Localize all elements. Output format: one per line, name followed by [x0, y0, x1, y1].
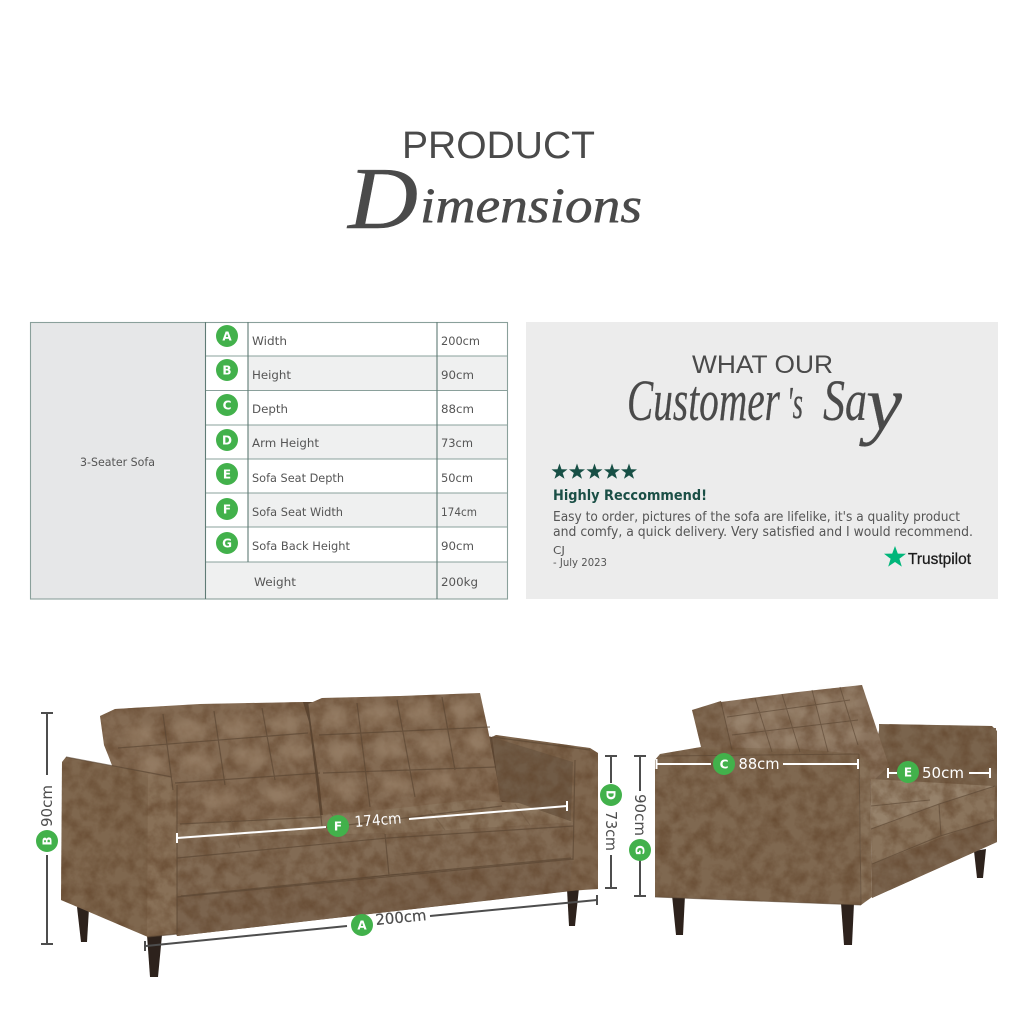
dimension G: back height 90cm: 90cm	[631, 794, 649, 836]
side stitching lines	[655, 687, 995, 905]
left arm front	[147, 774, 177, 937]
dimension E: seat depth 50cm: 50cm	[922, 764, 964, 782]
dimension A: width 200cm: 200cm	[375, 906, 427, 929]
side backing silhouette	[870, 726, 997, 898]
table row values: 174cm	[441, 505, 477, 519]
back cushions	[721, 685, 889, 782]
panel: dimensions table	[30, 322, 508, 599]
back cushion right	[308, 693, 502, 826]
table row values	[441, 334, 480, 589]
rating stars	[552, 464, 637, 479]
dimension E: seat depth 50cm: E	[904, 766, 912, 780]
dimension D: arm height 73cm	[600, 756, 622, 888]
review author: - July 2023	[553, 557, 607, 569]
side sofa legs	[672, 849, 986, 945]
table letter badges: E	[223, 468, 231, 482]
table row values: 88cm	[441, 402, 474, 416]
table row labels: Sofa Seat Depth	[252, 471, 344, 485]
table row values: 200cm	[441, 334, 480, 348]
table row labels: Sofa Seat Width	[252, 505, 343, 519]
review author: CJ	[553, 545, 565, 557]
panel: customer review	[526, 322, 998, 599]
dimension F: seat width 174cm	[177, 801, 567, 843]
table row labels: Width	[252, 334, 287, 348]
table letter badges: C	[223, 398, 232, 412]
table grid	[30, 322, 508, 599]
table row labels: Depth	[252, 402, 288, 416]
dimension C: depth 88cm	[656, 753, 858, 775]
review body	[553, 510, 973, 540]
right arm outer	[492, 735, 598, 891]
sofa upholstery	[61, 693, 598, 937]
title line: PRODUCT: PRODUCT	[402, 125, 595, 167]
seat cushion left	[177, 833, 389, 897]
table letter badges: F	[223, 502, 231, 516]
table row values: 50cm	[441, 471, 473, 485]
table shaded rows	[206, 356, 508, 599]
table row labels: Height	[252, 368, 292, 382]
side tuft highlights	[732, 689, 862, 750]
review body: Easy to order, pictures of the sofa are lifelike, it's a quality product	[553, 510, 960, 525]
trustpilot logo	[884, 546, 972, 568]
dimension B: height 90cm: B	[40, 836, 54, 846]
sofa legs	[77, 888, 579, 977]
dimension B: height 90cm: 90cm	[38, 785, 56, 827]
stitching lines	[66, 697, 590, 937]
arm panel main	[655, 747, 861, 905]
review heading script: 's	[787, 377, 803, 428]
dimension E: seat depth 50cm	[888, 761, 990, 783]
illustration: sofa front view	[61, 693, 598, 977]
table row labels: Weight	[254, 575, 297, 589]
back cushion left	[100, 702, 321, 826]
title script: Dimensions: D	[347, 151, 418, 248]
side upholstery	[655, 685, 997, 905]
seat cushion tops	[177, 800, 574, 860]
dimension F: seat width 174cm: F	[334, 820, 342, 834]
right arm inner	[492, 737, 575, 822]
table letter badges	[216, 325, 238, 554]
review author	[553, 545, 607, 569]
title	[347, 125, 642, 248]
dimension C: depth 88cm: 88cm	[738, 755, 780, 773]
dimension B: height 90cm	[36, 713, 58, 944]
table letter badges: B	[222, 364, 232, 378]
dimension A: width 200cm: A	[357, 918, 367, 932]
table row labels: Arm Height	[252, 436, 319, 450]
illustration: sofa side view	[655, 685, 997, 945]
table row labels	[252, 334, 350, 589]
table letter badges: D	[222, 434, 232, 448]
table left cell	[30, 322, 206, 599]
tuft highlights	[124, 700, 488, 808]
arm panel side	[859, 754, 872, 905]
base rail	[177, 858, 573, 936]
seat tops	[871, 779, 994, 829]
far arm	[879, 724, 997, 845]
dimension D: arm height 73cm: 73cm	[602, 811, 620, 851]
left arm side	[61, 757, 150, 937]
table row labels: Sofa Back Height	[252, 539, 350, 553]
seat cushion right	[385, 822, 574, 875]
backing silhouette	[110, 702, 580, 936]
table row values: 90cm	[441, 539, 474, 553]
review body: and comfy, a quick delivery. Very satisfied and I would recommend.	[553, 525, 973, 540]
dimension F: seat width 174cm: 174cm	[354, 809, 402, 831]
review heading script: Customer	[627, 368, 780, 433]
dimension A: width 200cm	[145, 895, 597, 951]
table letter badges: A	[222, 330, 232, 344]
review title: Highly Reccommend!	[553, 488, 707, 504]
base	[872, 818, 997, 898]
dimension C: depth 88cm: C	[720, 758, 729, 772]
dimension G: back height 90cm	[629, 756, 651, 896]
review heading: WHAT OUR: WHAT OUR	[692, 351, 833, 379]
review heading script: Sa	[823, 368, 867, 433]
back cushion end	[692, 701, 732, 750]
review heading script: y	[859, 360, 902, 447]
table row values: 90cm	[441, 368, 474, 382]
trustpilot logo: Trustpilot	[908, 551, 972, 568]
dimension D: arm height 73cm: D	[604, 790, 618, 800]
dimension G: back height 90cm: G	[632, 845, 646, 855]
table letter badges: G	[222, 536, 232, 550]
review background	[526, 322, 998, 599]
title script: Dimensions: imensions	[420, 177, 642, 233]
table row values: 73cm	[441, 436, 473, 450]
table product name: 3-Seater Sofa	[80, 455, 155, 469]
table row values: 200kg	[441, 575, 478, 589]
seat fronts	[871, 786, 995, 866]
